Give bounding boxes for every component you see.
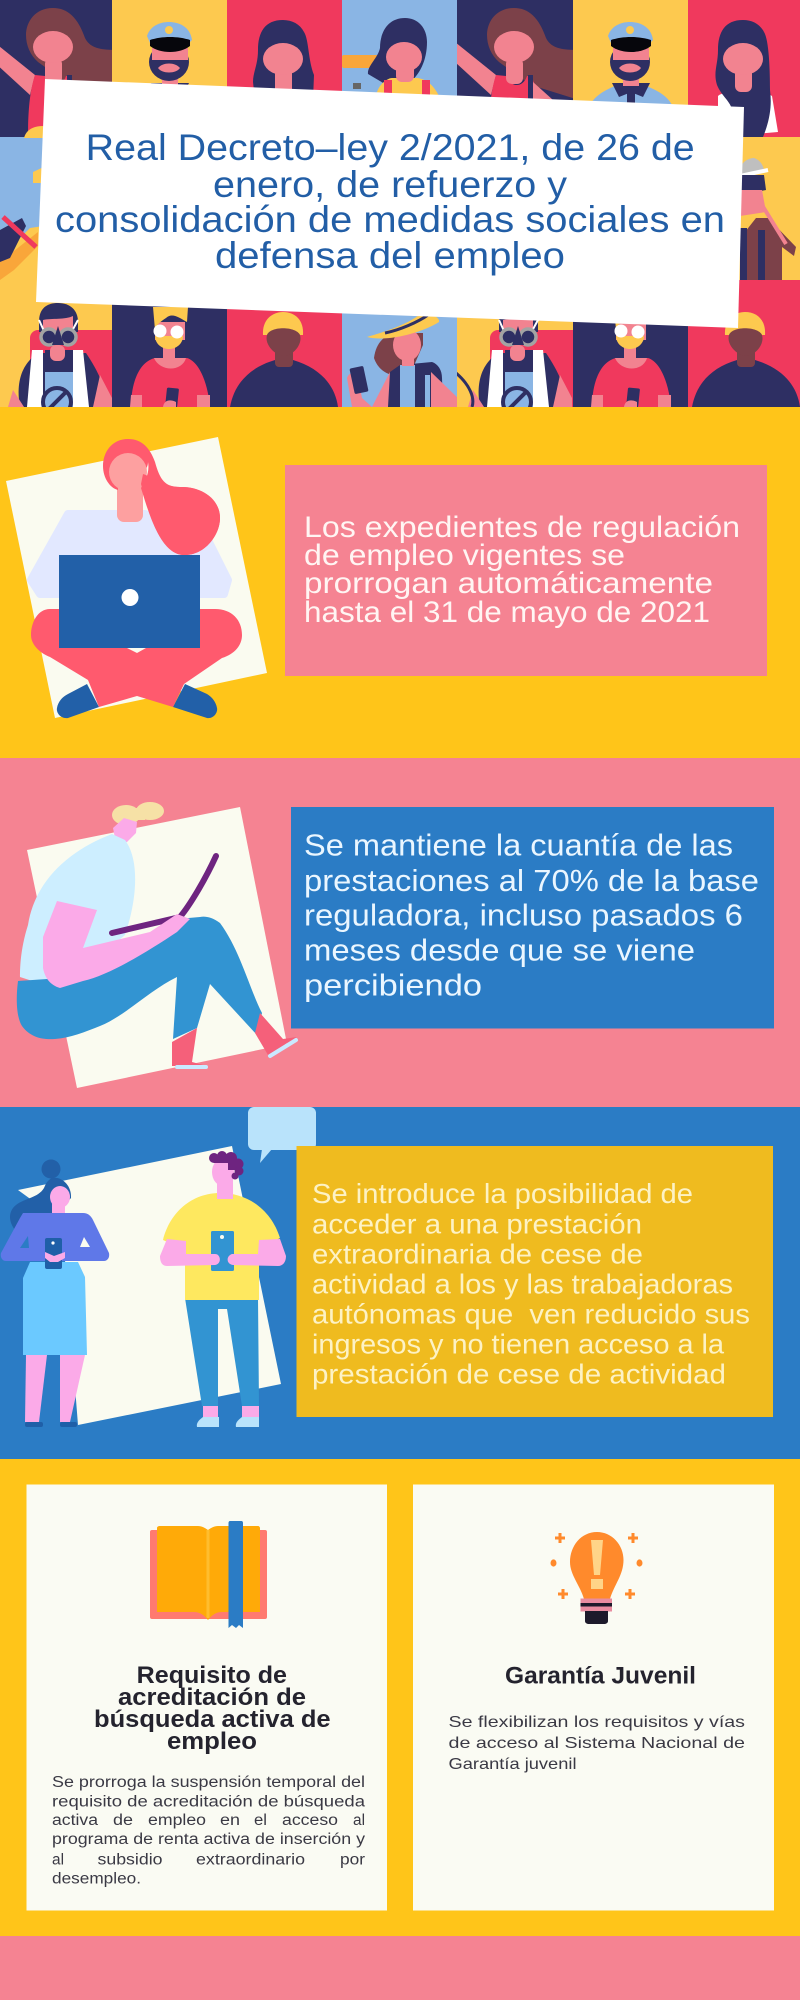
- text box: cuantía de las prestaciones: Se mantiene la cuantía de las: [304, 829, 733, 863]
- speech bubble: [248, 1107, 316, 1163]
- card body text: Se prorroga la suspensión temporal del: [52, 1774, 365, 1791]
- text box: cuantía de las prestaciones: percibiendo: [304, 969, 482, 1003]
- card body text: de acceso al Sistema Nacional de: [448, 1735, 745, 1752]
- card body text: [52, 1774, 365, 1888]
- card heading: Garantía Juvenil: [505, 1663, 696, 1690]
- card body text: subsidio: [98, 1852, 162, 1868]
- card: requisito de búsqueda activa: [26, 1484, 387, 1910]
- text box: prestación autónomos: ingresos y no tienen acceso a la: [312, 1329, 725, 1360]
- icon: open book: [150, 1521, 267, 1628]
- section: prestaciones: [0, 758, 800, 1107]
- woman with phone: [1, 1160, 109, 1427]
- text box: expedientes: prorrogan automáticamente: [304, 567, 713, 600]
- text box: cuantía de las prestaciones: reguladora, incluso pasados 6: [304, 899, 743, 933]
- card body text: programa de renta activa de inserción y: [52, 1831, 365, 1848]
- card heading: empleo: [167, 1728, 257, 1755]
- card body text: en: [220, 1812, 240, 1829]
- row one of portrait tiles: [0, 0, 800, 138]
- card body text: al: [353, 1812, 365, 1829]
- card heading: Requisito de: [137, 1662, 287, 1689]
- card body text: Se flexibilizan los requisitos y vías: [448, 1714, 745, 1731]
- text box: expedientes: Los expedientes de regulación: [304, 511, 740, 544]
- title text: Real Decreto–ley 2/2021, de 26 de: [86, 127, 695, 168]
- text box: prestación autónomos: [296, 1146, 773, 1417]
- card body text: de: [113, 1812, 133, 1829]
- title text: enero, de refuerzo y: [213, 164, 568, 205]
- title text: [55, 127, 725, 276]
- text box: expedientes: de empleo vigentes se: [304, 539, 625, 572]
- text box: prestación autónomos: actividad a los y las trabajadoras: [312, 1269, 733, 1300]
- illustration: woman with laptop sitting cross-legged: [6, 437, 267, 718]
- card body text: Garantía juvenil: [448, 1756, 576, 1773]
- title text: defensa del empleo: [215, 235, 565, 276]
- text box: cuantía de las prestaciones: meses desde que se viene: [304, 934, 695, 968]
- text box: expedientes: [285, 465, 767, 676]
- card body text: desempleo.: [52, 1870, 141, 1888]
- row three of portrait tiles: [0, 280, 800, 420]
- text box: expedientes: hasta el 31 de mayo de 2021: [304, 596, 710, 629]
- card body text: el: [254, 1812, 267, 1829]
- icon: light bulb: [550, 1532, 642, 1624]
- card body text: acceso: [282, 1812, 338, 1829]
- text box: prestación autónomos: prestación de cese de actividad: [312, 1359, 726, 1390]
- man with phone: [160, 1151, 286, 1427]
- card body text: activa: [52, 1812, 98, 1829]
- card body text: al: [52, 1852, 64, 1868]
- card body text: por: [340, 1852, 365, 1868]
- text box: cuantía de las prestaciones: prestaciones al 70% de la base: [304, 864, 759, 898]
- card body text: empleo: [148, 1812, 206, 1829]
- illustration: person seated with laptop: [17, 802, 297, 1088]
- card: garantía juvenil: [413, 1484, 774, 1910]
- section: ERTE extension: [0, 407, 800, 758]
- card heading: búsqueda activa de: [94, 1706, 331, 1733]
- card body text: extraordinario: [196, 1852, 305, 1868]
- section: cards: [0, 1459, 800, 1936]
- card heading: acreditación de: [118, 1684, 306, 1711]
- illustration: two people with phones: [1, 1107, 316, 1427]
- text box: prestación autónomos: extraordinaria de cese de: [312, 1239, 643, 1270]
- footer band: [0, 1936, 800, 2000]
- section: trabajadores autónomos: [0, 1107, 800, 1459]
- text box: prestación autónomos: acceder a una prestación: [312, 1209, 642, 1240]
- card heading: [94, 1662, 331, 1755]
- text box: cuantía de las prestaciones: [291, 807, 774, 1028]
- text box: prestación autónomos: Se introduce la posibilidad de: [312, 1178, 693, 1209]
- hero background grid of people: [0, 0, 800, 420]
- card body text: requisito de acreditación de búsqueda: [52, 1793, 365, 1810]
- row two of portrait tiles, mostly behind the title card: [0, 126, 800, 280]
- text box: prestación autónomos: autónomas que ven reducido sus: [312, 1299, 750, 1330]
- title card: [36, 79, 744, 328]
- title text: consolidación de medidas sociales en: [55, 199, 725, 240]
- card body text: [448, 1714, 745, 1773]
